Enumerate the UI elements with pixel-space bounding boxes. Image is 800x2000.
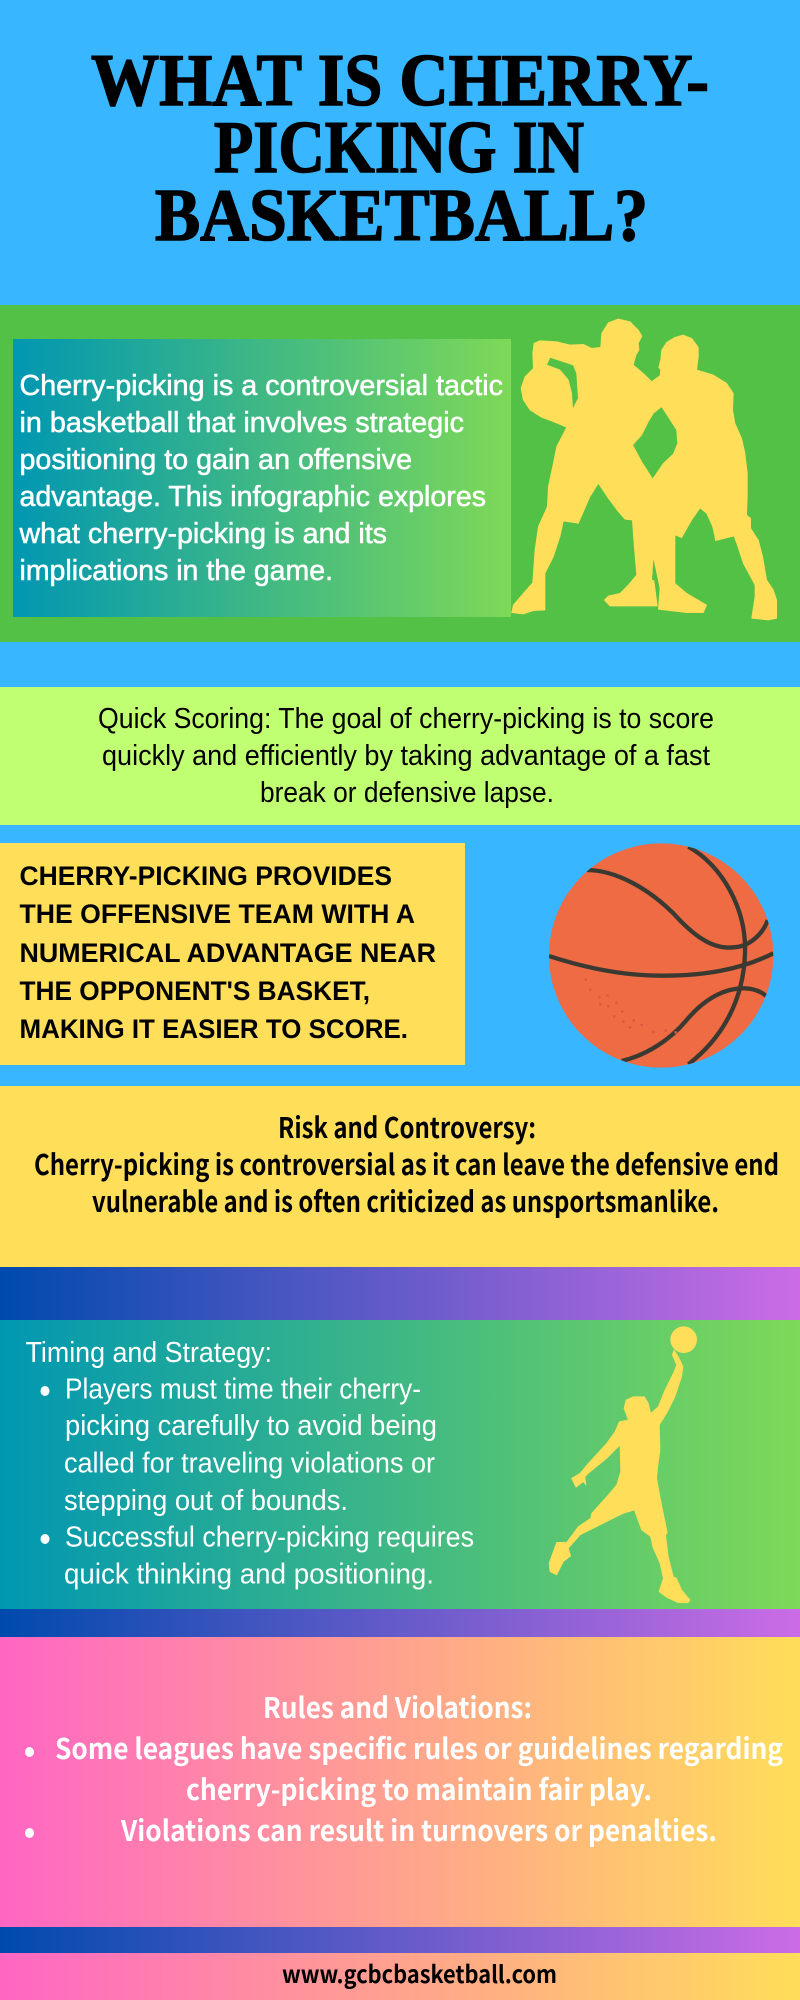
timing bullet list [40, 1374, 474, 1590]
timing bullet list: picking carefully to avoid being [65, 1410, 437, 1442]
panel: risk and controversy [0, 1086, 800, 1267]
panel: introduction [0, 305, 800, 642]
timing bullet list: stepping out of bounds. [64, 1485, 348, 1517]
panel: numerical advantage: THE OFFENSIVE TEAM WITH A [20, 899, 415, 929]
timing heading: Timing and Strategy: [26, 1337, 272, 1369]
panel: quick scoring: break or defensive lapse. [260, 777, 554, 809]
intro text box: positioning to gain an offensive [20, 444, 412, 476]
panel: rules and violations [0, 1637, 800, 1927]
panel: rules and violations: Rules and Violations: [263, 1686, 532, 1727]
timing bullet list: quick thinking and positioning. [64, 1558, 434, 1590]
title: PICKING IN [214, 107, 584, 189]
panel: numerical advantage: NUMERICAL ADVANTAGE NEAR [20, 938, 436, 968]
panel: quick scoring: Quick Scoring: The goal of cherry-picking is to score [98, 703, 714, 735]
panel: rules and violations: cherry-picking to maintain fair play. [186, 1768, 652, 1809]
gradient divider strip [0, 1267, 800, 1320]
gradient divider strip [0, 1609, 800, 1638]
intro text box: what cherry-picking is and its [19, 518, 387, 550]
title: WHAT IS CHERRY- [91, 40, 709, 122]
icon: basketball [549, 843, 773, 1068]
intro text box: advantage. This infographic explores [20, 481, 486, 513]
intro text box [13, 339, 511, 617]
timing bullet list: called for traveling violations or [64, 1448, 435, 1480]
icon: two basketball players silhouette [512, 319, 777, 620]
icon: jumping player silhouette [549, 1326, 697, 1603]
panel: numerical advantage [0, 843, 465, 1065]
footer: website [0, 1953, 800, 2000]
panel: numerical advantage: THE OPPONENT'S BASKET, [20, 976, 370, 1006]
panel: quick scoring [0, 687, 800, 825]
panel: numerical advantage: MAKING IT EASIER TO SCORE. [20, 1014, 408, 1044]
title [91, 40, 709, 257]
title: BASKETBALL? [155, 175, 648, 257]
panel: numerical advantage: CHERRY-PICKING PROVIDES [20, 861, 392, 891]
timing bullet list: Successful cherry-picking requires [65, 1522, 474, 1554]
intro text box: implications in the game. [20, 555, 333, 587]
gradient divider strip [0, 1927, 800, 1953]
panel: timing and strategy [0, 1320, 800, 1609]
intro text box: in basketball that involves strategic [20, 407, 464, 439]
panel: quick scoring: quickly and efficiently by taking advantage of a fast [102, 740, 710, 772]
panel: risk and controversy: Risk and Controversy: [278, 1106, 536, 1147]
footer: website: www.gcbcbasketball.com [282, 1955, 557, 1990]
panel: rules and violations: Violations can result in turnovers or penalties. [120, 1809, 717, 1850]
timing bullet list: Players must time their cherry- [65, 1374, 421, 1406]
intro text box: Cherry-picking is a controversial tactic [20, 370, 503, 402]
